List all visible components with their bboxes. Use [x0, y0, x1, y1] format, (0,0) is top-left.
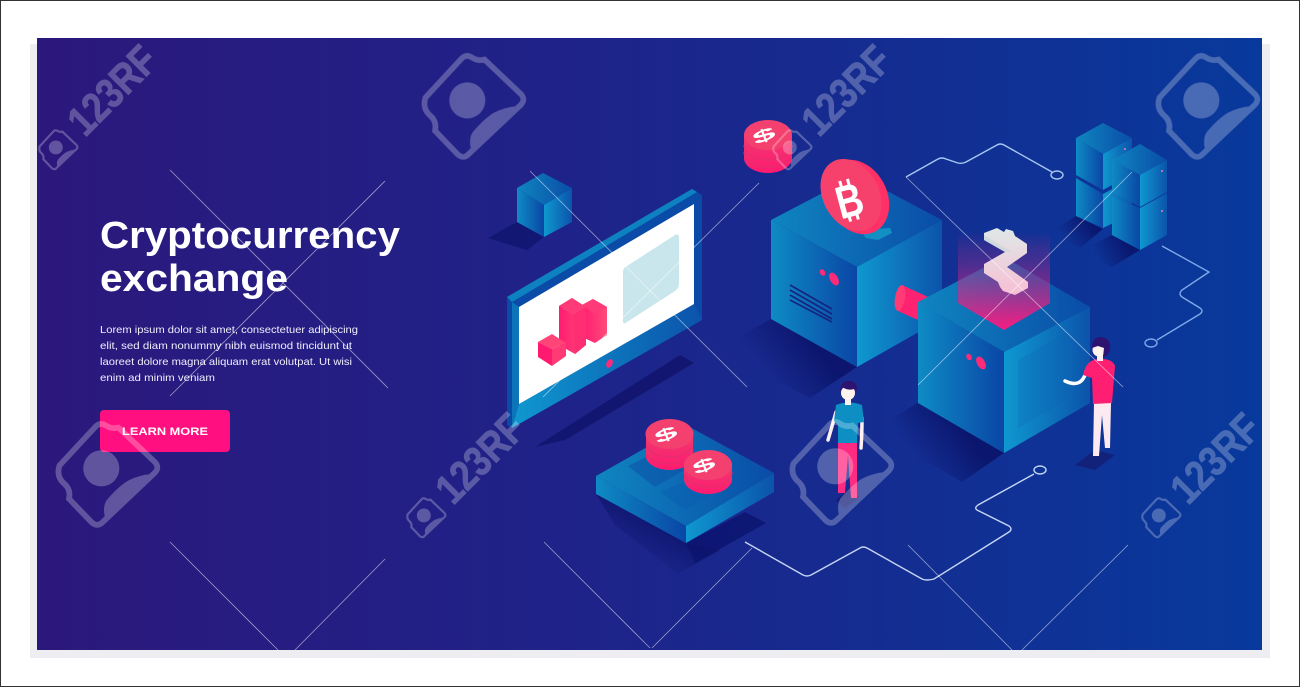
watermark icon: bottom centre	[792, 422, 891, 523]
bar chart	[538, 298, 607, 366]
title: exchange	[100, 258, 288, 300]
icon: bitcoin coin: B	[830, 172, 869, 229]
screen card	[623, 234, 679, 323]
coin shadows on platform	[628, 457, 684, 487]
indicator lights	[965, 353, 988, 371]
circuit line: bottom	[745, 466, 1046, 580]
coin stack: platform front	[684, 450, 732, 494]
cube: front lower	[1112, 193, 1167, 250]
body text: Lorem ipsum dolor sit amet, consectetuer adipiscing	[100, 324, 358, 336]
icon: bitcoin coin	[808, 148, 902, 246]
shadow: small cube	[488, 222, 544, 250]
hologram beam	[958, 232, 1050, 330]
monitor	[507, 189, 702, 428]
side panel	[1018, 328, 1075, 428]
connector pipe	[893, 284, 928, 320]
thin decorative crossing lines	[170, 170, 1132, 650]
indicator lights	[819, 268, 841, 287]
person: standing in pink shirt	[1065, 337, 1115, 470]
icon: Z symbol	[984, 228, 1028, 295]
cube: back lower	[1076, 178, 1132, 228]
person: standing in teal shirt	[828, 381, 864, 508]
watermark logo: top middle	[773, 36, 900, 169]
watermark icon: top right	[1158, 56, 1257, 157]
shadow: exchange box	[872, 403, 1004, 482]
platform	[596, 425, 774, 543]
coin stack: platform rear	[646, 419, 694, 470]
button: learn more	[100, 410, 230, 452]
shadow: server cubes	[1050, 216, 1140, 267]
shadow: platform	[596, 494, 720, 574]
coin slot	[860, 228, 892, 240]
watermark logo: bottom right	[1142, 404, 1269, 537]
button: learn more: LEARN MORE	[122, 426, 208, 438]
watermark icon: top centre	[424, 56, 523, 157]
watermark logo: bottom middle: 123RF	[426, 404, 534, 512]
monitor screen	[519, 204, 694, 404]
body text: elit, sed diam nonummy nibh euismod tincidunt ut	[100, 340, 352, 352]
server cubes	[1076, 123, 1167, 250]
watermark logo: top left	[39, 36, 166, 169]
coin stack: platform front: $	[689, 452, 719, 479]
cube: front upper	[1112, 144, 1167, 207]
body text: laoreet dolore magna aliquam erat volutpat. Ut wisi	[100, 356, 352, 368]
watermark logo: top middle: 123RF	[792, 36, 900, 144]
bitcoin box	[771, 175, 942, 367]
watermark logo: bottom middle	[407, 404, 534, 537]
coin stack: top	[744, 120, 792, 173]
watermark logo: bottom right: 123RF	[1161, 404, 1269, 512]
watermark logo: top left: 123RF	[58, 36, 166, 144]
circuit line: top	[906, 144, 1063, 179]
icon: small cube	[517, 173, 572, 237]
monitor indicator	[605, 358, 614, 369]
shadow: monitor	[535, 355, 694, 447]
watermarks	[39, 36, 1269, 537]
body text: enim ad minim veniam	[100, 372, 215, 384]
coin stack: top: $	[749, 122, 779, 149]
exchange box	[918, 228, 1090, 453]
cube: back upper	[1076, 123, 1132, 190]
shadow: bitcoin box	[715, 319, 857, 398]
circuit line: right	[1145, 246, 1209, 347]
vent lines	[790, 285, 832, 322]
title: Cryptocurrency	[100, 215, 400, 257]
status lights	[1124, 148, 1163, 212]
coin stack: platform rear: $	[651, 421, 681, 448]
watermark icon: bottom left	[58, 424, 157, 525]
